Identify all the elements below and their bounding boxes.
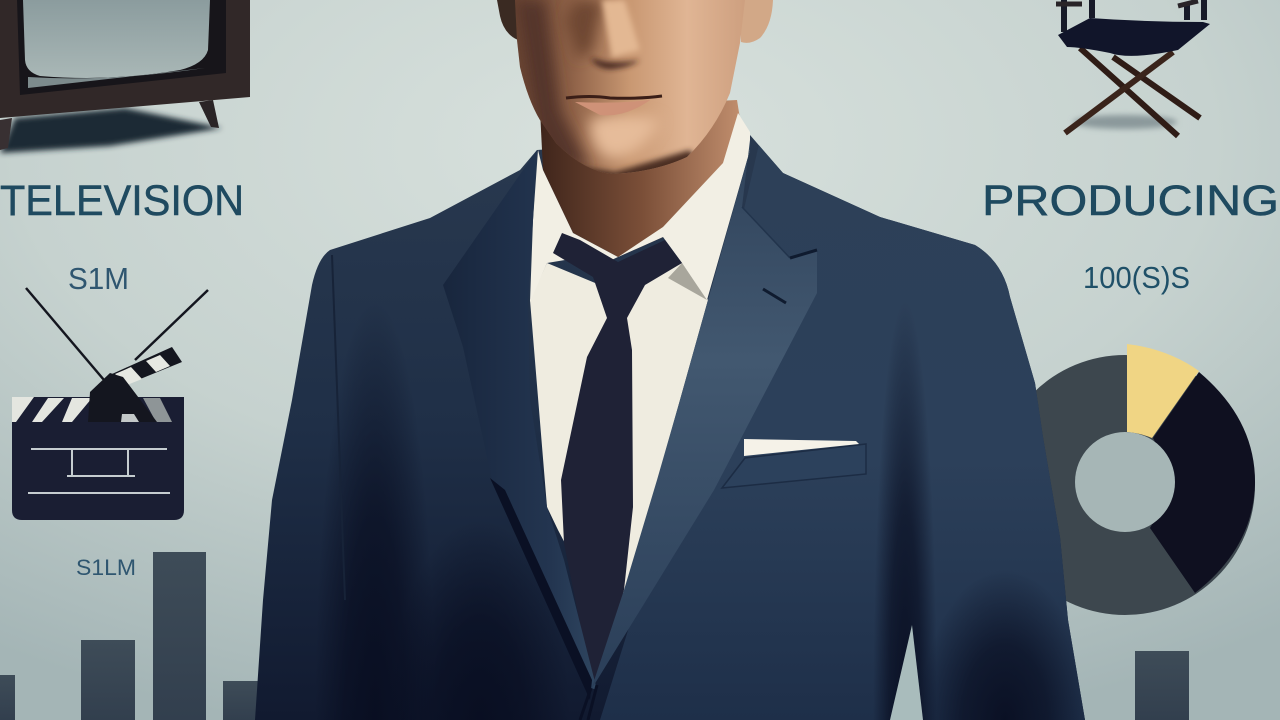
bar chart: right <box>1135 651 1189 720</box>
collar: right <box>618 113 750 300</box>
collar: left <box>530 150 618 302</box>
left lapel shadow <box>490 478 592 700</box>
collar shadow <box>668 263 707 300</box>
label: film value: S1LM <box>76 555 136 580</box>
bar chart: left <box>0 552 273 720</box>
face <box>515 0 744 174</box>
lower lip <box>575 100 650 115</box>
lapel notches <box>763 250 817 303</box>
label: television value: S1M <box>68 261 129 296</box>
icon: television <box>0 0 250 153</box>
heading: producing: PRODUCING <box>982 177 1279 225</box>
sleeve gap <box>890 625 923 720</box>
ear: left <box>497 0 520 40</box>
neck <box>540 100 745 257</box>
mouth line <box>566 96 662 98</box>
pocket square <box>744 439 859 456</box>
lapel collar seam <box>742 207 790 258</box>
nose shadow <box>590 58 640 69</box>
label: producing value: 100(S)S <box>1083 260 1190 295</box>
shirt <box>530 263 708 610</box>
donut chart <box>995 344 1255 615</box>
icon: clapperboard <box>12 288 208 520</box>
man in suit <box>255 0 1090 720</box>
left lapel <box>443 150 597 690</box>
pocket <box>722 444 866 488</box>
heading: television: TELEVISION <box>0 177 244 225</box>
suit jacket <box>255 135 1085 720</box>
tie <box>553 233 682 680</box>
right lapel <box>591 140 817 690</box>
center front closing <box>580 685 597 720</box>
ear: right <box>740 0 773 43</box>
icon: director's chair <box>1056 0 1210 136</box>
suit shading <box>315 140 1090 720</box>
